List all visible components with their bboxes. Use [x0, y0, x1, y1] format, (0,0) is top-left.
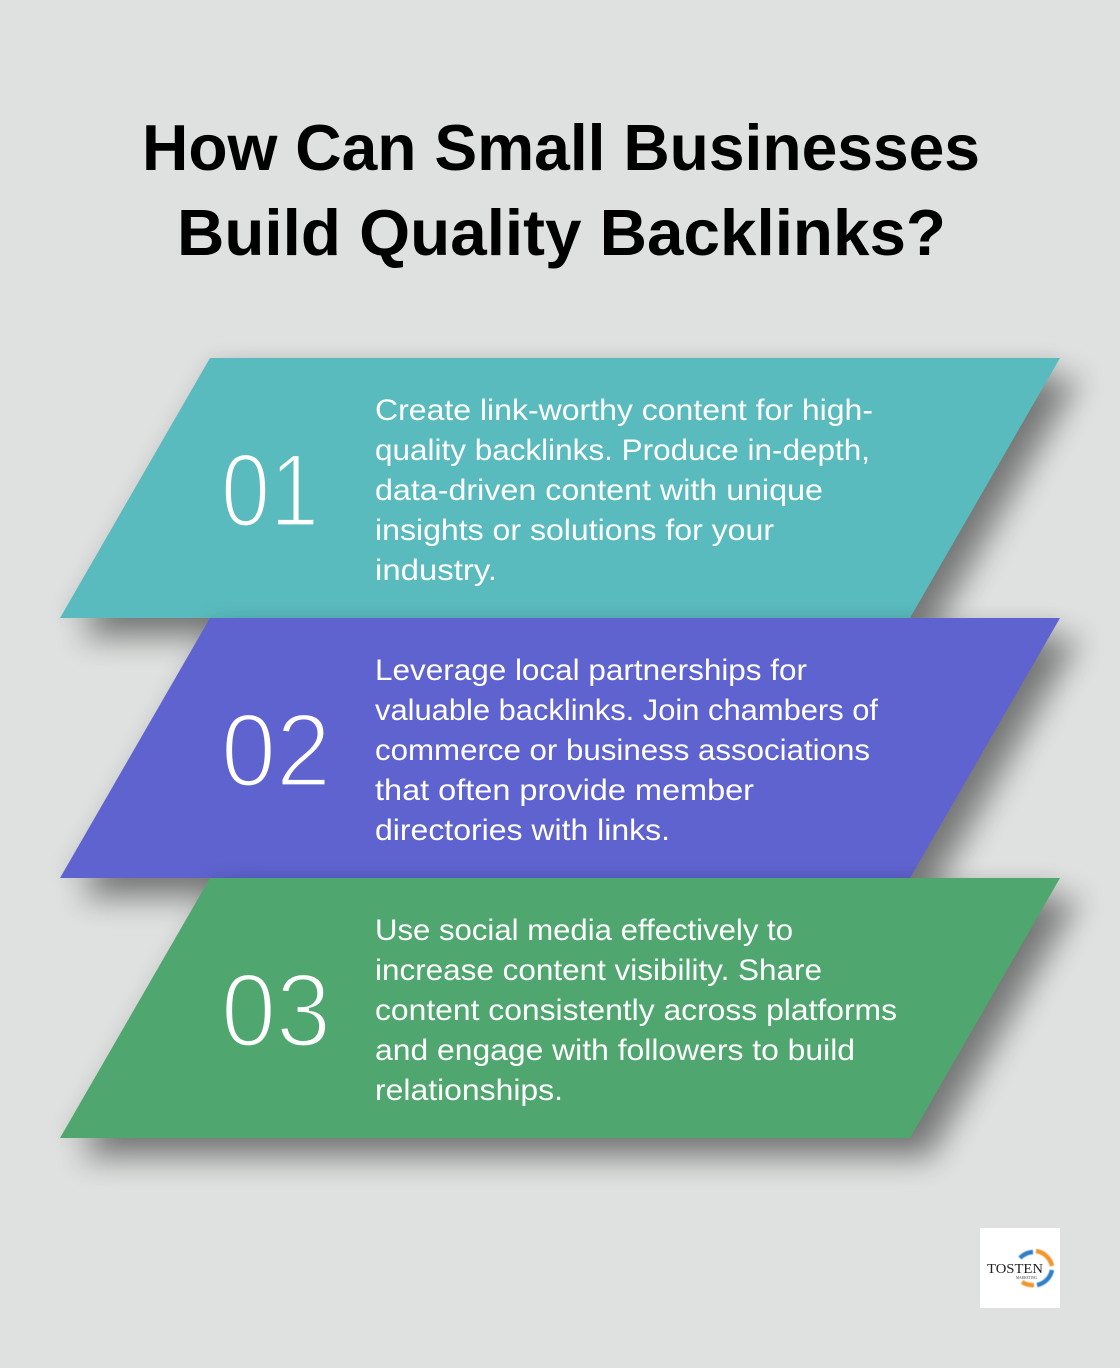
title	[142, 111, 980, 269]
logo: Tosten Marketing	[980, 1228, 1060, 1308]
step 02 text	[375, 654, 879, 847]
step 03 text: Use social media effectively to	[375, 914, 793, 947]
step 01 text: quality backlinks. Produce in-depth,	[375, 434, 870, 467]
number 01: 01	[221, 433, 319, 549]
step 03 text: content consistently across platforms	[375, 994, 897, 1027]
wordmark: TOSTEN	[987, 1261, 1043, 1276]
icon: gear arcs	[1020, 1251, 1052, 1285]
panel: step 02	[60, 618, 1080, 898]
number 02: 02	[221, 693, 331, 809]
step 02 text: directories with links.	[375, 814, 670, 847]
step 02 text: commerce or business associations	[375, 734, 870, 767]
title: How Can Small Businesses	[142, 111, 980, 184]
green parallelogram	[60, 878, 1060, 1138]
title: Build Quality Backlinks?	[177, 196, 946, 269]
step 03 text: relationships.	[375, 1074, 563, 1107]
step 01 text: industry.	[375, 554, 497, 587]
step 01 text: Create link-worthy content for high-	[375, 394, 873, 427]
step 01 text: insights or solutions for your	[375, 514, 774, 547]
teal parallelogram	[60, 358, 1060, 618]
purple parallelogram	[60, 618, 1060, 878]
panel: step 03	[60, 878, 1080, 1158]
step 02 text: Leverage local partnerships for	[375, 654, 807, 687]
step 01 text	[375, 394, 873, 587]
step 03 text: increase content visibility. Share	[375, 954, 822, 987]
panel: step 01	[60, 358, 1080, 638]
number 03: 03	[221, 953, 331, 1069]
tagline: MARKETING	[1016, 1275, 1037, 1280]
step 02 text: valuable backlinks. Join chambers of	[375, 694, 879, 727]
step 01 text: data-driven content with unique	[375, 474, 823, 507]
step 03 text	[375, 914, 897, 1107]
step 02 text: that often provide member	[375, 774, 754, 807]
step 03 text: and engage with followers to build	[375, 1034, 855, 1067]
